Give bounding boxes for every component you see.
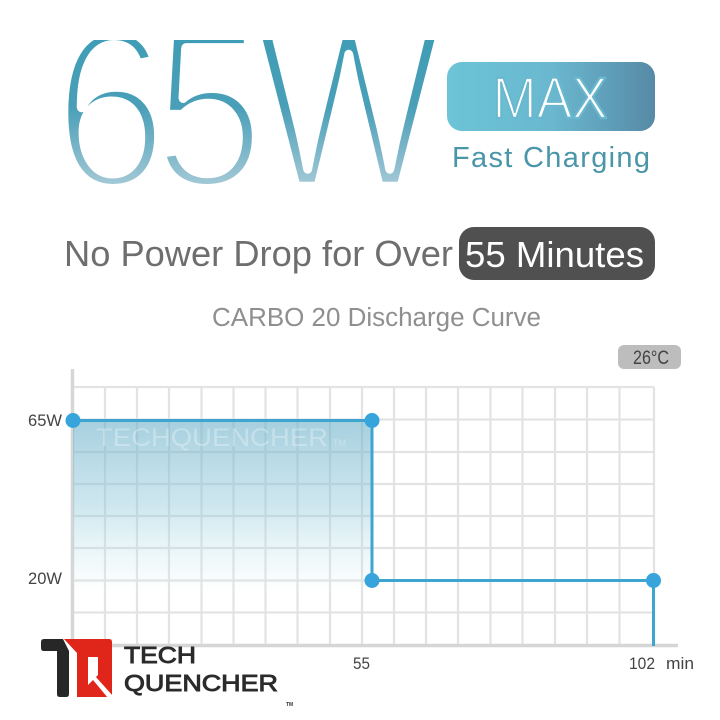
headline: No Power Drop: No Power Drop for Over — [64, 233, 453, 274]
subtitle: Fast Charging: Fast Charging — [452, 142, 650, 174]
logo: Tech Quencher — [41, 639, 293, 708]
discharge chart — [28, 369, 694, 673]
x labels — [353, 654, 694, 673]
y labels — [28, 411, 62, 588]
highlight: 55 Minutes — [459, 227, 655, 280]
curve — [73, 420, 654, 646]
watermark: TECHQUENCHER — [96, 424, 328, 452]
axes — [72, 369, 678, 646]
logo mark — [41, 639, 113, 698]
data points — [66, 413, 661, 588]
logo: Tech Quencher: TM — [286, 702, 293, 708]
badge: MAX — [447, 62, 655, 131]
badge: MAX: MAX — [492, 66, 608, 131]
highlight: 55 Minutes: 55 Minutes — [465, 234, 644, 275]
shaded area — [73, 421, 372, 593]
temperature tag — [618, 345, 681, 369]
chart title: CARBO 20 Discharge Curve — [212, 304, 541, 332]
x labels: 55 — [353, 654, 370, 673]
title: 65W — [68, 40, 434, 184]
grid — [72, 387, 654, 645]
x labels: min — [666, 654, 694, 673]
headline: No Power Drop — [64, 227, 655, 280]
y labels: 65W — [28, 411, 62, 430]
x labels: 102 — [629, 654, 655, 673]
logo text: TECH — [124, 642, 196, 668]
temperature tag: 26°C — [633, 348, 669, 369]
y labels: 20W — [28, 569, 62, 588]
watermark: TM — [333, 438, 346, 448]
logo: Tech Quencher: QUENCHER — [124, 670, 278, 696]
